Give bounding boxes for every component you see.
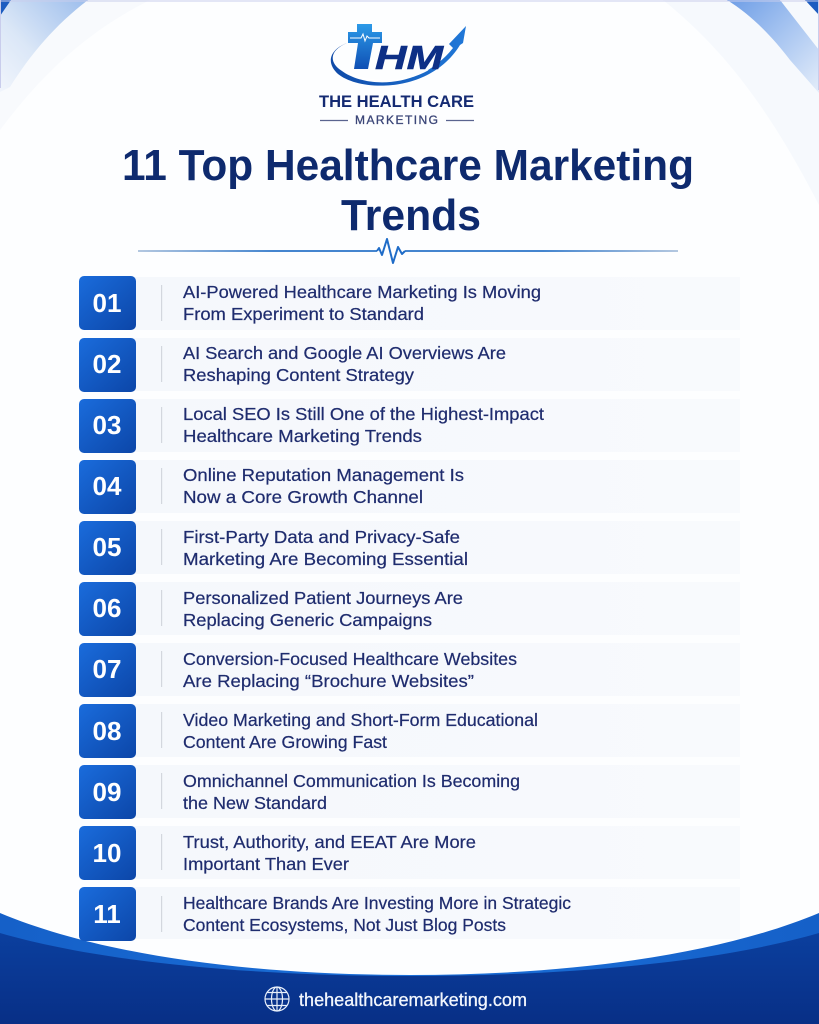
row 10: 10: [93, 838, 121, 868]
row 01: [79, 276, 740, 330]
logo: heartbeat in cross: [350, 34, 380, 41]
row 05: Marketing Are Becoming Essential: [183, 549, 468, 569]
row 04: 04: [93, 471, 122, 501]
row 08: Video Marketing and Short-Form Educational: [183, 710, 538, 730]
logo: HM letters: HM: [375, 39, 445, 76]
row 02: [79, 338, 740, 392]
row 07: Are Replacing “Brochure Websites”: [183, 671, 474, 691]
row 02: AI Search and Google AI Overviews Are: [183, 343, 506, 363]
row 09: [79, 765, 740, 819]
logo: swoosh and arrow: [331, 26, 466, 86]
row 01: From Experiment to Standard: [183, 304, 424, 324]
row 06: Personalized Patient Journeys Are: [183, 588, 463, 608]
decoration: page edge lines: [0, 0, 819, 90]
row 11: 11: [93, 899, 121, 929]
row 05: 05: [93, 532, 121, 562]
row 08: Content Are Growing Fast: [183, 732, 387, 752]
row 11: Content Ecosystems, Not Just Blog Posts: [183, 915, 506, 935]
row 04: [79, 460, 740, 514]
row 03: Local SEO Is Still One of the Highest-Impact: [183, 404, 544, 424]
row 06: 06: [93, 593, 121, 623]
row 08: [79, 704, 740, 758]
row 10: [79, 826, 740, 880]
row 04: Online Reputation Management Is: [183, 465, 464, 485]
footer website: thehealthcaremarketing.com: [299, 990, 527, 1010]
row 01: AI-Powered Healthcare Marketing Is Moving: [183, 282, 541, 302]
row 11: [79, 887, 740, 941]
row 08: 08: [93, 716, 121, 746]
row 06: [79, 582, 740, 636]
logo: lower swoosh highlight: [345, 70, 428, 80]
row 02: 02: [93, 349, 121, 379]
row 03: Healthcare Marketing Trends: [183, 426, 422, 446]
row 05: First-Party Data and Privacy-Safe: [183, 527, 460, 547]
row 02: Reshaping Content Strategy: [183, 365, 414, 385]
row 04: Now a Core Growth Channel: [183, 487, 423, 507]
divider with heartbeat: [138, 239, 678, 263]
row 09: the New Standard: [183, 793, 327, 813]
title: Trends: [341, 191, 481, 240]
trend list: [79, 276, 740, 941]
logo: medical cross with T: [348, 24, 382, 69]
icon: globe: [265, 987, 289, 1011]
row 01: 01: [93, 288, 121, 318]
title: 11 Top Healthcare Marketing: [122, 141, 694, 190]
decoration: top-left corner swoosh: [0, 0, 150, 130]
logo: wordmark: THE HEALTH CARE: [319, 93, 474, 111]
row 10: Trust, Authority, and EEAT Are More: [183, 832, 476, 852]
row 07: 07: [93, 654, 121, 684]
row 09: Omnichannel Communication Is Becoming: [183, 771, 520, 791]
footer band: [0, 913, 819, 1024]
row 06: Replacing Generic Campaigns: [183, 610, 432, 630]
row 10: Important Than Ever: [183, 854, 349, 874]
title: [122, 141, 694, 240]
row 07: Conversion-Focused Healthcare Websites: [183, 649, 517, 669]
row 05: [79, 521, 740, 575]
row 03: 03: [93, 410, 121, 440]
logo: tagline: MARKETING: [355, 113, 438, 127]
row 07: [79, 643, 740, 697]
row 11: Healthcare Brands Are Investing More in Strategic: [183, 893, 571, 913]
decoration: top-right corner swoosh: [663, 0, 819, 205]
row 03: [79, 399, 740, 453]
logo: [319, 24, 474, 127]
row 09: 09: [93, 777, 121, 807]
